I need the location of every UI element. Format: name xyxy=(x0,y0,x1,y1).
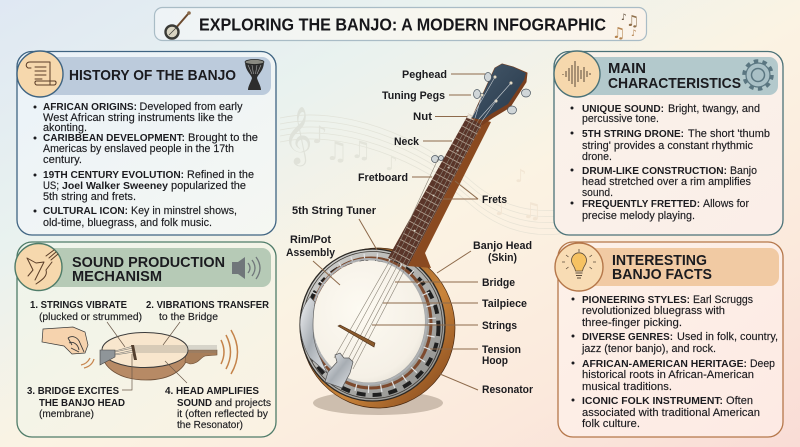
item: caribbean development: Brought to the xyxy=(188,132,258,144)
peghead xyxy=(472,64,527,125)
step 2 label: 2. VIBRATIONS TRANSFER xyxy=(146,300,270,311)
icon: sound wave xyxy=(554,51,600,97)
icon: banjo xyxy=(166,11,191,38)
step 3 label xyxy=(27,386,125,420)
label: frets: Frets xyxy=(482,194,507,206)
label: tuning pegs: Tuning Pegs xyxy=(382,90,445,102)
label: resonator xyxy=(440,374,533,396)
label: nut: Nut xyxy=(413,111,433,123)
step 4 label: 4. HEAD AMPLIFIES xyxy=(165,386,259,397)
text list: musical traditions. xyxy=(582,381,672,393)
label: banjo head xyxy=(437,240,532,273)
item: 19th century evolution: 19TH CENTURY EVOLUTION: xyxy=(43,170,184,181)
banjo diagram xyxy=(42,322,238,390)
tension hooks xyxy=(310,257,432,389)
label: rim/pot assembly xyxy=(286,234,340,285)
text list: head stretched over a rim amplifies xyxy=(582,176,751,188)
decorative sheet music xyxy=(280,106,660,235)
item: 5th string drone: 5TH STRING DRONE: xyxy=(582,129,684,140)
head xyxy=(313,260,425,382)
item: frequently fretted: FREQUENTLY FRETTED: xyxy=(582,199,700,210)
text list xyxy=(572,294,778,430)
decorative sheet music: 𝄞 xyxy=(283,106,313,167)
nut xyxy=(467,115,484,123)
text list: historical roots in African-American xyxy=(582,369,754,381)
leader lines xyxy=(107,322,187,390)
text list: jazz (tenor banjo), and rock. xyxy=(581,343,716,355)
heading: INTERESTING xyxy=(612,252,707,269)
label: tailpiece: Tailpiece xyxy=(482,298,527,310)
decorative sheet music: ♪ xyxy=(495,196,508,220)
title bar xyxy=(154,8,646,42)
text list: precise melody playing. xyxy=(582,210,695,222)
header band xyxy=(579,248,779,286)
rim slots xyxy=(306,259,438,395)
part labels xyxy=(286,69,533,396)
item: unique sound: UNIQUE SOUND: xyxy=(582,104,664,115)
resonator xyxy=(301,248,455,408)
armrest xyxy=(300,297,327,373)
icon: speaker xyxy=(232,257,260,279)
label: peghead xyxy=(402,69,485,81)
text list: akonting. xyxy=(43,122,87,134)
heading: MECHANISM xyxy=(72,268,162,285)
head xyxy=(102,332,188,368)
item: cultural icon: Key in minstrel shows, xyxy=(131,205,237,217)
text list: US; xyxy=(43,180,59,192)
step 3 label: 3. BRIDGE EXCITES xyxy=(27,386,119,397)
step 1 label xyxy=(30,300,142,323)
item: unique sound: Bright, twangy, and xyxy=(668,103,760,115)
text list xyxy=(34,101,258,229)
item: 19th century evolution: Refined in the xyxy=(187,169,254,181)
icon: gear xyxy=(744,61,772,89)
decorative sheet music: ♫ xyxy=(522,199,542,224)
decorative sheet music: ♪ xyxy=(385,151,398,175)
icon: djembe drum xyxy=(245,60,264,90)
step 4 label: SOUND xyxy=(177,398,212,409)
label: bridge: Bridge xyxy=(482,277,515,289)
item: 5th string drone: The short 'thumb xyxy=(688,128,770,140)
header band xyxy=(577,57,778,95)
item: african-american heritage: AFRICAN-AMERICAN HERITAGE: xyxy=(582,359,747,370)
tuning pegs xyxy=(432,72,530,162)
text list: string' provides a constant rhythmic xyxy=(582,140,754,152)
shadow xyxy=(313,391,443,415)
text list: popularized the xyxy=(171,180,246,192)
strings and tailpiece xyxy=(115,346,217,355)
label: banjo head: (Skin) xyxy=(488,252,517,264)
item: caribbean development: CARIBBEAN DEVELOPMENT: xyxy=(43,133,185,144)
text list: percussive tone. xyxy=(582,113,659,125)
panel: history of the banjo xyxy=(17,51,276,235)
item: african-american heritage: Deep xyxy=(750,358,775,370)
text list: 5th string and frets. xyxy=(43,191,136,203)
step 3 label: (membrane) xyxy=(39,409,94,420)
icon: music notes: ♫ xyxy=(626,12,639,30)
header band xyxy=(38,248,271,287)
item: diverse genres: DIVERSE GENRES: xyxy=(582,332,673,343)
item: drum-like construction: Banjo xyxy=(730,165,757,177)
text list: century. xyxy=(43,154,82,166)
heading xyxy=(608,60,741,92)
item: iconic folk instrument: Often xyxy=(726,395,753,407)
label: neck: Neck xyxy=(394,136,419,148)
text list: West African string instruments like the xyxy=(43,112,233,124)
strings xyxy=(334,117,482,369)
label: 5th string tuner xyxy=(292,205,377,250)
bridge xyxy=(338,325,375,347)
step 3 label: THE BANJO HEAD xyxy=(39,398,125,409)
item: diverse genres: Used in folk, country, xyxy=(677,331,778,343)
brown tone ring xyxy=(311,258,431,388)
rim xyxy=(102,352,188,380)
label: banjo head: Banjo Head xyxy=(473,240,532,252)
label: tension hoop xyxy=(430,344,521,367)
step 4 label: it (often reflected by xyxy=(177,409,269,420)
step 4 label xyxy=(165,386,271,431)
label: strings: Strings xyxy=(482,320,517,332)
label: fretboard xyxy=(358,172,432,184)
text list: old-time, bluegrass, and folk music. xyxy=(43,217,212,229)
label: resonator: Resonator xyxy=(482,384,533,396)
item: african origins: AFRICAN ORIGINS: xyxy=(43,102,137,113)
label: fretboard: Fretboard xyxy=(358,172,408,184)
label: nut xyxy=(413,111,467,123)
heading: HISTORY OF THE BANJO xyxy=(69,67,236,84)
decorative sheet music: ♪ xyxy=(312,121,327,149)
item: african origins: Developed from early xyxy=(140,101,243,113)
text list: associated with traditional American xyxy=(582,407,760,419)
neck wood xyxy=(408,120,491,268)
icon: music notes: ♪ xyxy=(631,29,637,39)
icon: music notes: ♫ xyxy=(612,24,625,42)
item: pioneering styles: PIONEERING STYLES: xyxy=(582,295,690,306)
item: frequently fretted: Allows for xyxy=(703,198,749,210)
rim xyxy=(300,249,445,401)
item: iconic folk instrument: ICONIC FOLK INSTRUMENT: xyxy=(582,396,723,407)
heading xyxy=(612,252,712,283)
heading: MAIN xyxy=(608,60,646,77)
decorative sheet music: ♫ xyxy=(350,136,372,164)
step 1 label: (plucked or strummed) xyxy=(39,312,142,323)
label: 5th string tuner: 5th String Tuner xyxy=(292,205,376,217)
fretboard xyxy=(388,115,484,266)
title text: EXPLORING THE BANJO: A MODERN INFOGRAPHIC xyxy=(199,14,606,34)
tailpiece xyxy=(325,353,353,388)
step 1 label: 1. STRINGS VIBRATE xyxy=(30,300,127,311)
heading xyxy=(72,254,225,285)
label: frets xyxy=(443,181,507,206)
item: drum-like construction: DRUM-LIKE CONSTRUCTION: xyxy=(582,166,727,177)
icon: music notes xyxy=(612,12,639,42)
panel: main characteristics xyxy=(554,51,783,235)
text list: three-finger picking. xyxy=(582,317,682,329)
hand xyxy=(42,327,88,354)
text list xyxy=(570,103,770,222)
label: rim/pot assembly: Assembly xyxy=(286,247,335,259)
label: tension hoop: Tension xyxy=(482,344,521,356)
decorative sheet music: ♪ xyxy=(515,166,526,187)
neck xyxy=(185,350,217,364)
step 4 label: the Resonator) xyxy=(177,420,243,431)
sound waves xyxy=(221,330,238,374)
icon: scroll xyxy=(17,51,63,97)
label: rim/pot assembly: Rim/Pot xyxy=(290,234,331,246)
text list: folk culture. xyxy=(582,418,640,430)
step 2 label xyxy=(146,300,270,323)
icon: music notes: ♪ xyxy=(621,13,627,23)
icon: light bulb xyxy=(555,243,603,291)
central banjo illustration xyxy=(300,64,530,415)
text list: sound. xyxy=(582,187,613,199)
header band xyxy=(40,57,271,95)
step 2 label: to the Bridge xyxy=(159,312,218,323)
text list: Americas by enslaved people in the 17th xyxy=(43,143,234,155)
text list: revolutionized bluegrass with xyxy=(582,305,725,317)
item: cultural icon: CULTURAL ICON: xyxy=(43,206,128,217)
label: bridge xyxy=(395,277,515,289)
label: neck xyxy=(394,136,452,148)
step 4 label: and projects xyxy=(215,398,271,409)
label: peghead: Peghead xyxy=(402,69,447,81)
text list: Joel Walker Sweeney xyxy=(62,181,168,192)
decorative sheet music: ♫ xyxy=(325,137,348,167)
item: pioneering styles: Earl Scruggs xyxy=(693,294,753,306)
icon: plucking hand xyxy=(15,244,62,290)
label: tension hoop: Hoop xyxy=(482,355,508,367)
heading: SOUND PRODUCTION xyxy=(72,254,225,271)
panel: interesting banjo facts xyxy=(555,242,783,437)
panel: sound production mechanism xyxy=(15,242,276,437)
heading: CHARACTERISTICS xyxy=(608,75,741,92)
heading: BANJO FACTS xyxy=(612,266,712,283)
text list: drone. xyxy=(582,151,612,163)
